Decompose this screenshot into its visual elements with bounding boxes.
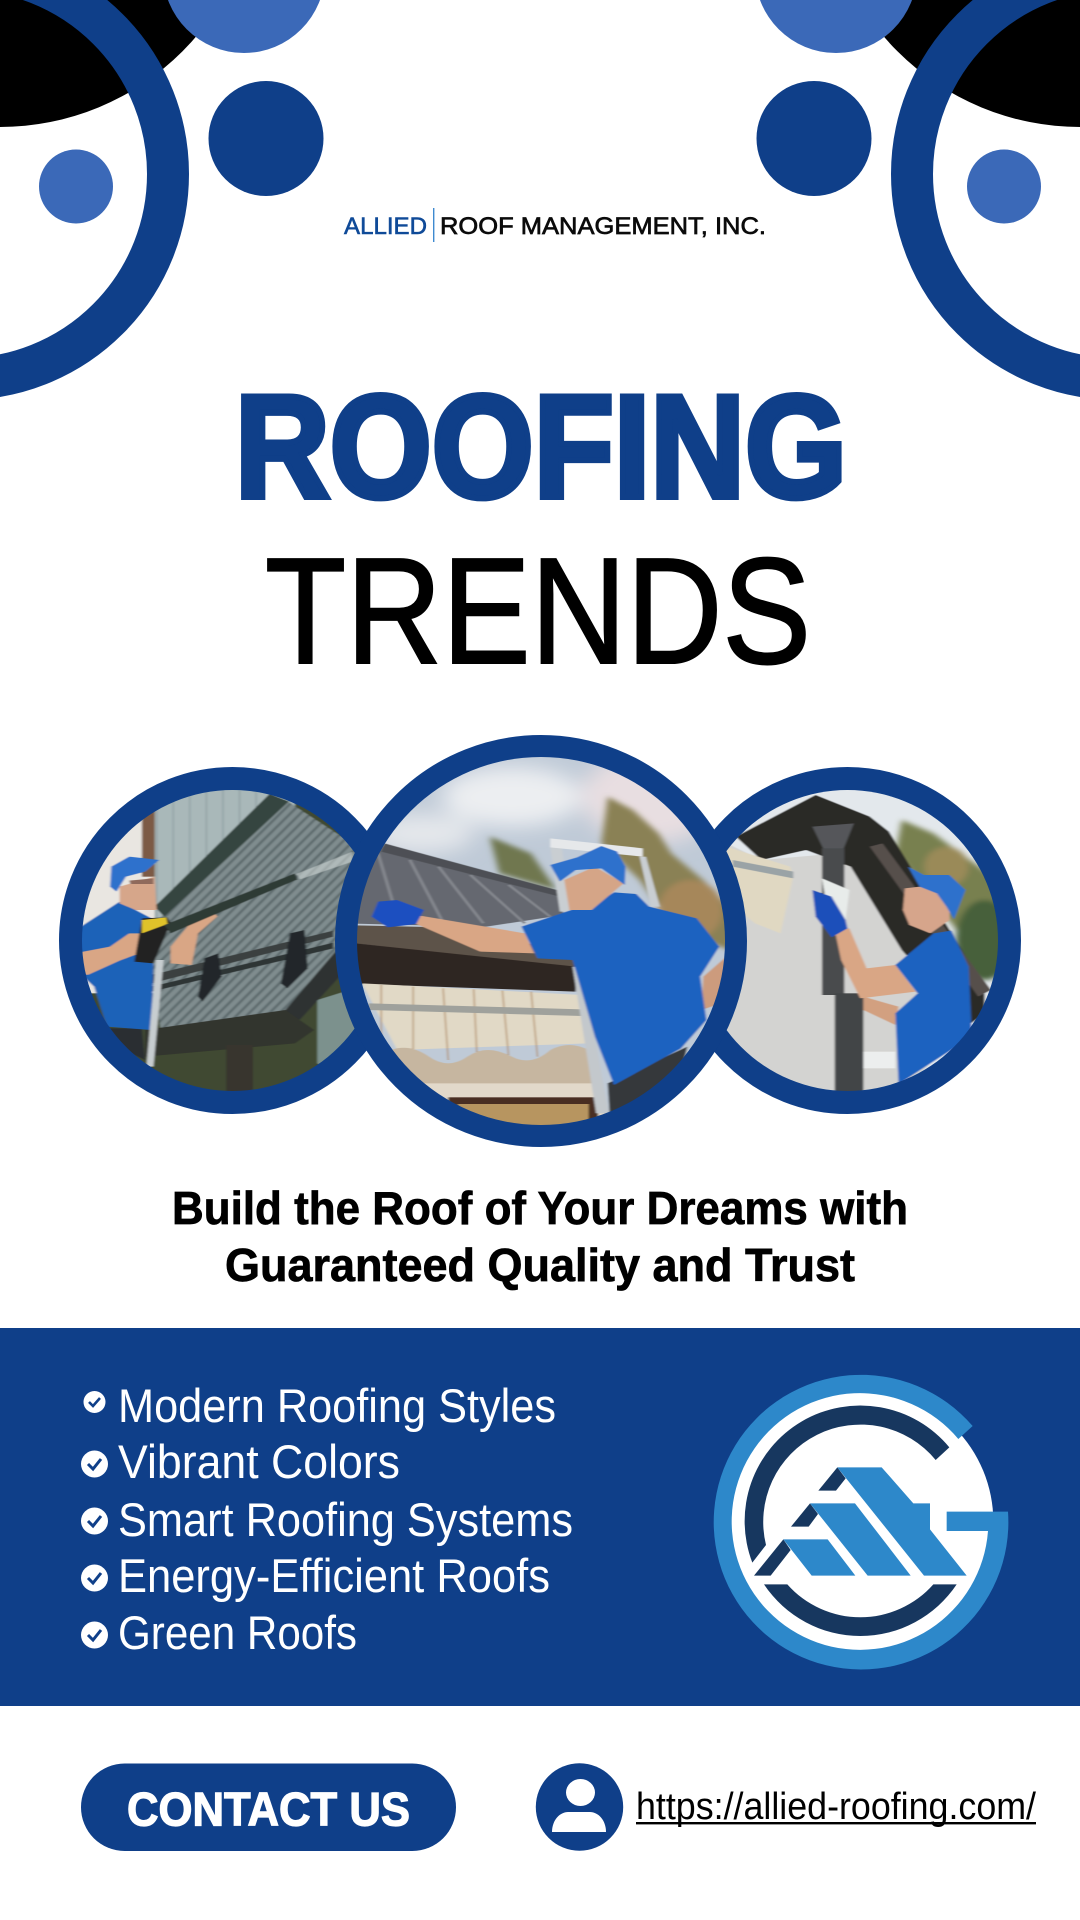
decoration: top-right circles <box>756 0 1080 397</box>
photo: right worker fitting a downpipe <box>674 767 1021 1114</box>
company logo wordmark: ALLIED <box>344 213 427 240</box>
button: contact us <box>81 1764 456 1851</box>
item: Green Roofs: Green Roofs <box>118 1606 357 1659</box>
icon: company G roof emblem <box>714 1374 1008 1670</box>
company logo wordmark <box>344 208 766 242</box>
photo: centre worker on a ladder at the gutter <box>334 735 746 1147</box>
photo: left worker power-washing a metal roof <box>59 767 406 1114</box>
feature checklist <box>81 1379 573 1659</box>
subheading: Guaranteed Quality and Trust <box>225 1239 855 1291</box>
item: Vibrant Colors: Vibrant Colors <box>118 1435 400 1488</box>
decoration: top-left circles <box>0 0 324 397</box>
icon: person <box>536 1763 624 1851</box>
subheading <box>172 1182 908 1291</box>
item: Energy-Efficient Roofs: Energy-Efficient Roofs <box>118 1549 550 1602</box>
company logo wordmark: ROOF MANAGEMENT, INC. <box>440 213 766 240</box>
item: Modern Roofing Styles: Modern Roofing Styles <box>118 1379 556 1432</box>
panel: blue feature band <box>0 1328 1080 1706</box>
man <box>109 1028 145 1060</box>
button: contact us: CONTACT US <box>127 1782 410 1836</box>
